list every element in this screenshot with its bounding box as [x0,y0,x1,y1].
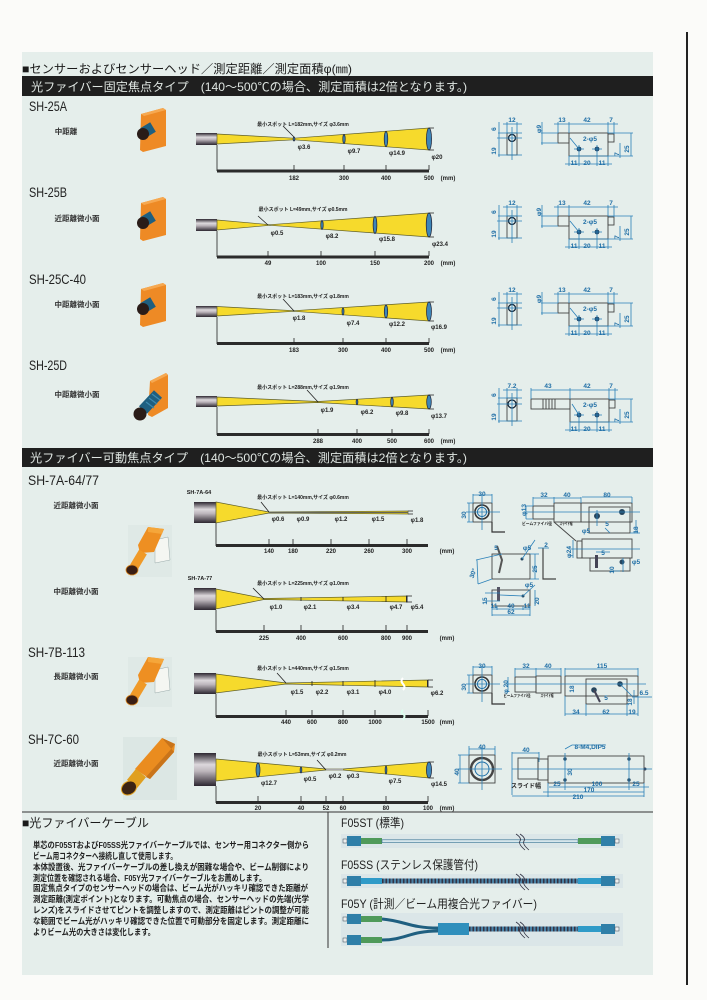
dimension drawing: SH-7B-113: ビームファイバ径 [504,692,531,699]
dimension drawing: SH-25B: 12 [508,200,516,207]
beam chart: SH-7A-64: φ0.6 [272,517,285,523]
beam chart: SH-7A-77: φ5.4 [411,605,424,611]
dimension drawing: SH-25B: φ9 [536,207,543,216]
text block: cable description: よりビーム光の大きさは変化します。 [33,926,155,937]
beam chart: SH-25D: 288 [313,439,324,445]
row: SH-25A [29,99,633,182]
cable: F05ST [341,815,623,850]
dimension drawing: SH-7C-60: 170 [584,787,595,794]
row: SH-7B-113: SH-7B-113 [28,645,85,660]
beam chart: SH-7A-64: φ1.5 [372,517,385,523]
dimension drawing: SH-25B [491,200,633,250]
beam chart: SH-7A-77: 最小スポット L=225mm,サイズ φ1.0mm [257,580,349,587]
beam chart: SH-25B: 200 [424,261,435,267]
beam chart: SH-7A-64: (mm) [440,549,454,555]
beam chart: SH-25D: (mm) [441,439,455,445]
beam chart: SH-25C-40: 500 [424,348,435,354]
dimension drawing: SH-25B: 2-φ5 [583,219,597,226]
dimension drawing: SH-25A: 7 [614,152,621,156]
icon: SH-25D sensor [134,373,168,420]
beam chart: SH-7B-113: 440 [281,720,292,726]
dimension drawing: SH-25D: 25 [624,411,631,419]
beam chart: SH-7A-77: 600 [338,636,349,642]
dimension drawing: SH-7A: 62 [507,609,515,616]
dimension drawing: SH-7B-113: 40 [544,663,552,670]
beam chart: SH-25C-40: φ12.2 [389,322,406,328]
beam chart: SH-25B: 150 [370,261,381,267]
divider: cable section rule [22,812,653,948]
row: SH-25D: 中距離微小面 [54,389,100,399]
beam chart: SH-7B-113: 最小スポット L=440mm,サイズ φ1.5mm [257,665,349,672]
dimension drawing: SH-7B-113: 6.5 [639,690,649,697]
beam chart: SH-7A-77: φ1.0 [270,605,283,611]
beam chart: SH-25B: 100 [316,261,327,267]
beam chart: SH-25D: 600 [424,439,435,445]
heading: sensors and heads: ■センサーおよびセンサーヘッド／測定距離／測定面積φ(㎜) [22,61,352,76]
dimension drawing: SH-7A: 30 [478,491,486,498]
beam chart: SH-25B: φ8.2 [326,234,339,240]
dimension drawing: SH-25C-40 [491,287,633,337]
text block: cable description: 単芯のF05STおよびF05SS光ファイバーケーブルでは、センサー用コネクター側から [33,839,309,850]
row: SH-7A-64/77: SH-7A-64/77 [28,473,99,488]
dimension drawing: SH-25C-40: 42 [583,287,591,294]
dimension drawing: SH-7C-60: 25 [632,781,640,788]
heading: optical fiber cable: ■光ファイバーケーブル [22,815,149,830]
beam chart: SH-25B: 最小スポット L=49mm,サイズ φ0.5mm [259,206,348,213]
dimension drawing: SH-7A: 20 [534,597,541,605]
beam chart: SH-7C-60: 20 [255,806,262,812]
icon: SH-7A sensor [126,525,172,577]
dimension drawing: SH-25A [491,117,633,167]
dimension drawing: SH-25A: 12 [508,117,516,124]
dimension drawing: SH-7B-113: スライド幅 [540,692,554,699]
row: SH-25B: 近距離微小面 [54,213,100,223]
cable: F05Y: F05Y (計測／ビーム用複合光ファイバー) [341,896,537,911]
dimension drawing: SH-25D: 42 [583,383,591,390]
dimension drawing: SH-25B: 6 [491,210,498,214]
dimension drawing: SH-25B: 19 [491,230,498,238]
text block: cable description [33,839,309,937]
beam chart: SH-7C-60: 60 [340,806,347,812]
beam chart: SH-25C-40: 最小スポット L=183mm,サイズ φ1.8mm [257,293,349,300]
text block: cable description: ビーム用コネクターへ接続し直して使用します。 [33,850,177,861]
beam chart: SH-25C-40: φ16.9 [431,325,448,331]
dimension drawing: SH-7A [461,491,641,616]
dimension drawing: SH-7A: φ5 [632,559,641,566]
beam chart: SH-7A-64: 140 [264,549,275,555]
dimension drawing: SH-7A: 15 [482,597,489,605]
dimension drawing: SH-7A: φ24 [566,546,573,558]
beam chart: SH-7A-77: 400 [296,636,307,642]
beam chart: SH-7B-113: (mm) [440,720,454,726]
beam chart: SH-25C-40: φ7.4 [347,321,360,327]
beam chart: SH-25D: φ13.7 [431,414,448,420]
beam chart: SH-25D: φ1.9 [321,408,334,414]
dimension drawing: SH-7C-60: 25 [553,781,561,788]
beam chart: SH-25B [196,206,455,267]
beam chart: SH-7A-64: SH-7A-64 [187,490,212,496]
dimension drawing: SH-25C-40: 12 [508,287,516,294]
dimension drawing: SH-7C-60: 8-M4,DIP5 [574,744,606,751]
cable: F05SS [341,857,623,890]
dimension drawing: SH-25C-40: 7 [609,287,613,294]
cable: F05SS: F05SS (ステンレス保護管付) [341,857,478,872]
dimension drawing: SH-25A: 20 [583,160,591,167]
dimension drawing: SH-25A: 19 [491,147,498,155]
dimension drawing: SH-25D: 6 [491,393,498,397]
icon: SH-25C sensor [137,283,166,327]
dimension drawing: SH-7C-60: 210 [573,794,584,801]
cable: F05ST: F05ST (標準) [341,815,404,830]
dimension drawing: SH-25C-40: 7 [614,322,621,326]
dimension drawing: SH-7A: 40 [563,492,571,499]
beam chart: SH-7C-60: φ12.7 [261,781,278,787]
dimension drawing: SH-7A: φ5 [523,545,532,552]
dimension drawing: SH-7C-60: 40 [454,768,461,776]
dimension drawing: SH-7B-113: 62 [602,709,610,716]
dimension drawing: SH-25B: 13 [558,200,566,207]
dimension drawing: SH-7A: 32 [540,492,548,499]
beam chart: SH-7A-77: 800 [381,636,392,642]
beam chart: SH-7A-64 [187,490,454,555]
dimension drawing: SH-25D: 7 [609,383,613,390]
dimension drawing: SH-25B: 7 [614,235,621,239]
dimension drawing: SH-25A: 2-φ5 [583,136,597,143]
beam chart: SH-25B: φ0.5 [271,231,284,237]
beam chart: SH-7A-77 [188,576,454,642]
beam chart: SH-25A: φ14.9 [389,151,406,157]
row: SH-25A: SH-25A [29,99,67,114]
row: SH-25C-40: SH-25C-40 [29,272,86,287]
beam chart: SH-25A: 182 [289,176,300,182]
beam chart: SH-25C-40: 300 [338,348,349,354]
dimension drawing: SH-7A: 2 [544,542,548,549]
beam chart: SH-7C-60: φ0.5 [304,777,317,783]
beam chart: SH-25C-40: (mm) [441,348,455,354]
dimension drawing: SH-25B: 20 [583,243,591,250]
row: SH-7B-113: 長距離微小面 [54,671,99,681]
text block: cable description: レンズ)をスライドさせてピントを調整しますので、測定距離はピントの調整が可能 [33,904,309,915]
dimension drawing: SH-7A: 18 [633,526,640,534]
beam chart: SH-25A: φ3.6 [298,145,311,151]
dimension drawing: SH-7A: φ5 [582,528,591,535]
row: SH-7C-60: 近距離微小面 [54,758,99,768]
beam chart: SH-7B-113: φ6.2 [431,691,444,697]
dimension drawing: SH-7C-60: 40 [478,744,486,751]
dimension drawing: SH-25A: 25 [624,145,631,153]
beam chart: SH-7C-60: 最小スポット L=53mm,サイズ φ0.2mm [258,751,347,758]
beam chart: SH-25A: φ20 [432,155,443,161]
dimension drawing: SH-25D: 2-φ5 [583,402,597,409]
beam chart: SH-7A-64: φ1.8 [411,518,424,524]
icon: SH-7C sensor [119,737,177,800]
row: SH-7A-64/77: 近距離微小面 [54,500,99,510]
beam chart: SH-25D: φ9.8 [396,411,409,417]
beam chart: SH-7A-77: 900 [402,636,413,642]
dimension drawing: SH-25C-40: 19 [491,317,498,325]
beam chart: SH-25D: φ6.2 [361,410,374,416]
row: SH-25C-40 [29,272,633,354]
dimension drawing: SH-25C-40: 11 [571,330,578,337]
beam chart: SH-7B-113: 1500 [421,720,435,726]
beam chart: SH-7B-113: φ1.5 [291,690,304,696]
dimension drawing: SH-7A: 11 [491,603,498,610]
right page edge line [686,32,688,985]
beam chart: SH-7A-64: 260 [364,549,375,555]
beam chart: SH-7A-64: 220 [326,549,337,555]
band: variable focus type: 光ファイバー可動焦点タイプ (140～500℃の場合、測定面積は2倍となります。) [30,450,467,465]
beam chart: SH-7C-60: (mm) [440,806,454,812]
dimension drawing: SH-25C-40: 6 [491,297,498,301]
dimension drawing: SH-25B: 11 [599,243,606,250]
dimension drawing: SH-7A: 30° [468,567,479,579]
dimension drawing: SH-7A: スライド幅 [560,520,572,527]
dimension drawing: SH-7C-60: 100 [592,781,603,788]
dimension drawing: SH-25C-40: 11 [599,330,606,337]
beam chart: SH-7A-64: φ0.9 [297,517,310,523]
beam chart: SH-7B-113: φ4.0 [379,690,392,696]
beam chart: SH-7C-60: φ0.2 [329,774,342,780]
dimension drawing: SH-25D: 19 [491,413,498,421]
dimension drawing: SH-25D: 11 [571,426,578,433]
beam chart: SH-7A-64: 180 [288,549,299,555]
beam chart: SH-25A: (mm) [441,176,455,182]
beam chart: SH-25B: 49 [265,261,272,267]
beam chart: SH-25C-40 [196,293,455,354]
beam chart: SH-25B: φ23.4 [432,242,449,248]
beam chart: SH-25D [196,384,455,445]
dimension drawing: SH-7B-113: 32 [522,663,530,670]
text block: cable description: 測定位置を確認される場合、F05Y光ファイバーケーブルをお薦めします。 [33,872,266,883]
dimension drawing: SH-25A: 6 [491,127,498,131]
dimension drawing: SH-25D [491,383,633,433]
dimension drawing: SH-25C-40: 20 [583,330,591,337]
dimension drawing: SH-7B-113: 18 [627,698,634,706]
row: SH-25B: SH-25B [29,185,67,200]
dimension drawing: SH-7B-113: 19 [628,709,636,716]
dimension drawing: SH-7A: 40 [507,603,515,610]
beam chart: SH-25A: φ9.7 [348,149,361,155]
beam chart: SH-25D: 最小スポット L=288mm,サイズ φ1.9mm [257,384,349,391]
dimension drawing: SH-7A: 5 [494,545,498,552]
beam chart: SH-7A-77: SH-7A-77 [188,576,212,582]
row: SH-7B-113 [28,645,652,726]
row: SH-25D [29,358,633,445]
beam chart: SH-7B-113: φ2.2 [316,690,329,696]
row: SH-25A: 中距離 [55,126,78,136]
beam chart: SH-25A: 500 [424,176,435,182]
beam chart: SH-7C-60: φ14.5 [431,782,448,788]
row: SH-7A-64/77: 中距離微小面 [54,586,99,596]
beam chart: SH-25A: 400 [381,176,392,182]
beam chart: SH-7A-77: 225 [259,636,270,642]
beam chart: SH-7A-77: (mm) [440,636,454,642]
beam chart: SH-25C-40: 400 [381,348,392,354]
text block: cable description: 固定焦点タイプのセンサーヘッドの場合は、ビーム光がハッキリ確認できた距離が [33,882,308,893]
beam chart: SH-7A-64: 300 [402,549,413,555]
dimension drawing: SH-7C-60 [454,744,652,801]
dimension drawing: SH-25A: 13 [558,117,566,124]
icon: SH-7B sensor [126,657,172,707]
dimension drawing: SH-7A: 80 [603,492,611,499]
cable: F05Y [341,896,623,946]
icon: SH-25B sensor [137,197,166,241]
band: fixed focus type [22,76,653,96]
beam chart: SH-7C-60: 80 [383,806,390,812]
beam chart: SH-25D: 400 [352,439,363,445]
dimension drawing: SH-25A: 7 [609,117,613,124]
row: SH-7C-60 [28,732,652,812]
beam chart: SH-25B: (mm) [441,261,455,267]
dimension drawing: SH-25D: 7 [614,418,621,422]
icon: SH-25A sensor [137,108,166,152]
dimension drawing: SH-7B-113: φ 20 [503,680,510,694]
dimension drawing: SH-7C-60: スライド幅 [511,782,541,790]
beam chart: SH-7A-64: 最小スポット L=140mm,サイズ φ0.6mm [257,494,349,501]
dimension drawing: SH-25B: 11 [571,243,578,250]
beam chart: SH-25A [196,121,455,182]
dimension drawing: SH-7A: ビームファイバ径 [522,520,553,527]
beam chart: SH-7A-64: φ1.2 [335,517,348,523]
text block: cable description: 測定距離(測定ポイント)となります。可動焦点の場合、センサーヘッドの先端(光学 [33,893,309,904]
dimension drawing: SH-25D: 11 [599,426,606,433]
beam chart: SH-25C-40: 183 [289,348,300,354]
dimension drawing: SH-7A: 25 [532,565,539,573]
dimension drawing: SH-7B-113: 18 [569,685,576,693]
dimension drawing: SH-7A: 10 [609,566,616,574]
dimension drawing: SH-7B-113: 5 [604,695,608,702]
dimension drawing: SH-7B-113: 115 [597,663,608,670]
dimension drawing: SH-7B-113: 30 [478,663,486,670]
beam chart: SH-7C-60: 52 [323,806,330,812]
dimension drawing: SH-25D: 7.2 [507,383,517,390]
beam chart: SH-7A-77: φ3.4 [347,605,360,611]
dimension drawing: SH-7A: 5 [605,521,609,528]
dimension drawing: SH-25B: 7 [609,200,613,207]
beam chart: SH-7B-113 [194,665,454,726]
dimension drawing: SH-7A: 30 [461,511,468,519]
beam chart: SH-7C-60: 100 [423,806,434,812]
beam chart: SH-7C-60: 40 [298,806,305,812]
beam chart: SH-25A: 300 [339,176,350,182]
beam chart: SH-7B-113: 800 [338,720,349,726]
dimension drawing: SH-7A: 11 [524,603,531,610]
dimension drawing: SH-7A: φ5 [525,582,534,589]
beam chart: SH-25D: 500 [387,439,398,445]
row: SH-25B [29,185,633,267]
beam chart: SH-25A: 最小スポット L=182mm,サイズ φ3.6mm [257,121,349,128]
dimension drawing: SH-25A: 11 [599,160,606,167]
beam chart: SH-7B-113: 600 [307,720,318,726]
beam chart: SH-7C-60 [194,751,454,812]
row: SH-7A-64/77 [28,473,641,642]
dimension drawing: SH-7C-60: 40 [522,747,530,754]
dimension drawing: SH-7B-113 [461,663,652,716]
dimension drawing: SH-25A: φ9 [536,124,543,133]
beam chart: SH-7C-60: φ7.5 [389,779,402,785]
dimension drawing: SH-25A: 42 [583,117,591,124]
row: SH-7C-60: SH-7C-60 [28,732,79,747]
text block: cable description: な範囲でビーム光がハッキリ確認できた位置で可動部分を固定します。測定距離に [33,915,309,926]
beam chart: SH-7A-77: φ2.1 [304,605,317,611]
beam chart: SH-7A-77: φ4.7 [390,605,403,611]
dimension drawing: SH-25D: 43 [544,383,552,390]
beam chart: SH-7B-113: 1000 [368,720,382,726]
dimension drawing: SH-25B: 25 [624,228,631,236]
dimension drawing: SH-25B: 42 [583,200,591,207]
dimension drawing: SH-7B-113: 34 [572,709,580,716]
beam chart: SH-7B-113: φ3.1 [347,690,360,696]
beam chart: SH-25C-40: φ1.8 [293,316,306,322]
dimension drawing: SH-25C-40: 13 [558,287,566,294]
dimension drawing: SH-25C-40: 2-φ5 [583,306,597,313]
dimension drawing: SH-25D: 20 [583,426,591,433]
dimension drawing: SH-25A: 11 [571,160,578,167]
dimension drawing: SH-7C-60: 30 [567,768,574,776]
beam chart: SH-7C-60: φ0.3 [347,774,360,780]
dimension drawing: SH-7B-113: 30 [461,683,468,691]
beam chart: SH-25B: φ15.8 [379,237,396,243]
band: fixed focus type: 光ファイバー固定焦点タイプ (140～500℃の場合、測定面積は2倍となります。) [31,79,467,94]
text block: cable description: 本体設置後、光ファイバーケーブルの差し換えが困難な場合や、ビーム制御により [33,861,309,872]
band: variable focus type [22,448,653,467]
dimension drawing: SH-7A: φ13 [521,504,528,516]
dimension drawing: SH-7A: 5 [601,550,605,557]
dimension drawing: SH-25C-40: 25 [624,315,631,323]
row: SH-25C-40: 中距離微小面 [54,299,100,309]
dimension drawing: SH-25C-40: φ9 [536,294,543,303]
row: SH-25D: SH-25D [29,358,67,373]
